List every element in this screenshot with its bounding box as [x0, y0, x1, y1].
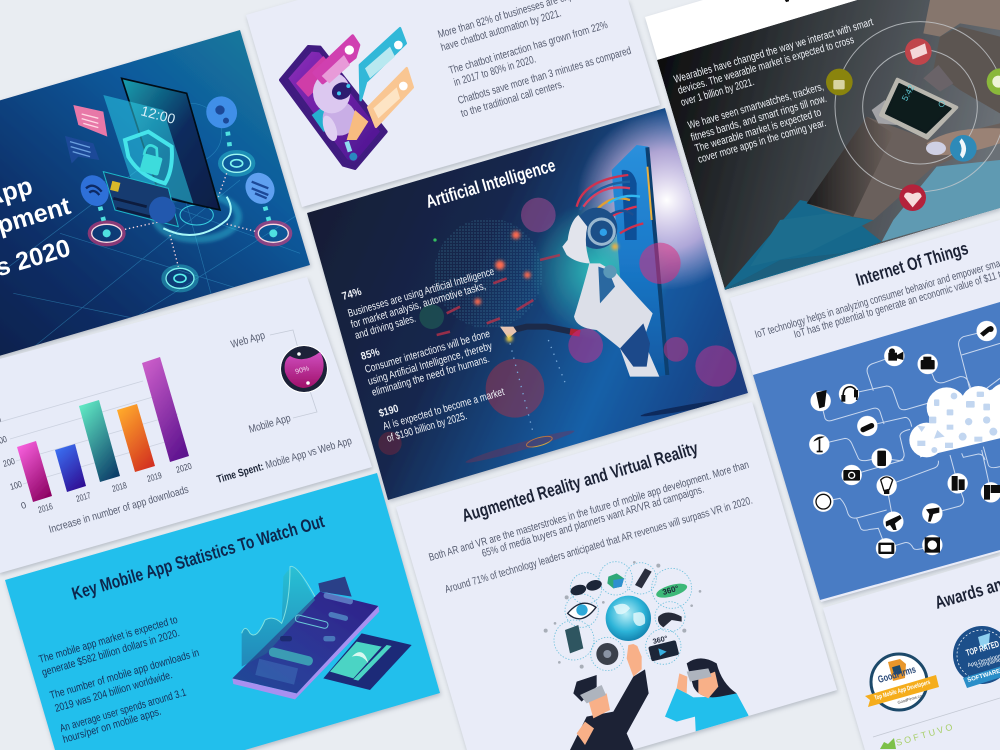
- AI statistics text: Consumer interactions will be done: [363, 328, 492, 376]
- wearables text: Wearables have changed the way we interact with smart: [672, 16, 875, 86]
- wearables text: [672, 16, 875, 166]
- AI statistics text: for market analysis, automotive tasks,: [349, 280, 487, 331]
- smartwatch photo: [657, 0, 1000, 290]
- wearables text: We have seen smartwatches, trackers,: [686, 81, 825, 132]
- IoT background: [730, 220, 1000, 602]
- AI statistics text: $190: [377, 403, 400, 420]
- GoodFirms badge: Top Mobile App Developers: [874, 679, 931, 702]
- chatbots text: Chatbots save more than 3 minutes as compared: [456, 45, 633, 107]
- device glyphs: [813, 326, 1000, 554]
- glass panel: [103, 95, 193, 203]
- statistics text: The mobile app market is expected to: [37, 614, 179, 666]
- Softuvo logo: SOFTUVO: [895, 721, 956, 748]
- cyborg emerging from phone illustration: [378, 110, 757, 466]
- panel: wearables: [645, 0, 1000, 290]
- bar chart: app downloads: 2018: [111, 480, 128, 494]
- panel: hero title slide: [0, 30, 310, 370]
- donut gauge: mobile vs web: 90%: [295, 365, 310, 376]
- AR VR text: Around 71% of technology leaders anticipated that AR revenues will surpass VR in 2020.: [443, 495, 754, 596]
- bar chart: app downloads: 2020: [175, 461, 193, 475]
- credit card: [103, 172, 178, 227]
- shield and padlock: [125, 132, 172, 183]
- panel: charts: [0, 277, 372, 573]
- cube: [607, 573, 624, 588]
- chatbots text: [436, 0, 633, 120]
- hero illustration: [0, 78, 300, 350]
- hero title: [0, 172, 74, 301]
- 360 label: [656, 584, 688, 598]
- AI background: [307, 108, 748, 500]
- wearables text: fitness bands, and smart rings till now.: [689, 93, 828, 144]
- AR VR text: Both AR and VR are the masterstrokes in the future of mobile app development. More than: [427, 459, 750, 564]
- wearables text: devices. The wearable market is expected to cross: [676, 34, 856, 97]
- eye: [568, 603, 596, 619]
- grid lines: [0, 381, 182, 484]
- donut gauge: mobile vs web: Time Spent: Mobile App vs Web App: [215, 435, 353, 486]
- wearables text: over 1 billion by 2021.: [679, 76, 756, 109]
- man with headset: [570, 644, 649, 750]
- torso: [574, 263, 659, 377]
- robot in phone illustration: [281, 28, 413, 168]
- globe: [606, 596, 651, 641]
- cloud mini icons: [917, 392, 997, 453]
- panel: augmented and virtual reality: [396, 402, 837, 750]
- statistics text: [37, 614, 201, 746]
- arm: [807, 117, 1000, 220]
- statistics background: [5, 473, 440, 750]
- AR VR text: 65% of media buyers and planners want AR/VR ad campaigns.: [480, 484, 706, 560]
- GoodFirms badge: GoodFirms.co: [897, 693, 923, 705]
- donut gauge: mobile vs web: Web App: [229, 330, 266, 351]
- bar chart: app downloads: [0, 357, 193, 536]
- chatbots background: [246, 0, 660, 207]
- woman with headset: [665, 658, 750, 750]
- IoT network diagram: [753, 302, 1000, 600]
- AR VR title: Augmented Reality and Virtual Reality: [460, 438, 700, 526]
- AI statistics text: 85%: [359, 346, 381, 363]
- phone: [122, 78, 220, 210]
- statistics text: hours/per on mobile apps.: [61, 706, 163, 746]
- panel: key mobile app statistics: [5, 473, 440, 750]
- donut gauge: mobile vs web: Mobile App: [247, 412, 292, 436]
- isometric phone and card illustration: [232, 566, 412, 699]
- bar chart: app downloads: 100: [9, 479, 23, 492]
- bar chart: app downloads: 2017: [75, 490, 92, 504]
- AI statistics text: using Artificial Intelligence, thereby: [366, 340, 494, 388]
- statistics text: 2019 was 204 billion worldwide.: [53, 669, 174, 715]
- head: [576, 208, 617, 249]
- bar chart: app downloads: 200: [2, 456, 16, 469]
- statistics text: generate $582 billion dollars in 2020.: [40, 627, 181, 679]
- chat bubbles: [73, 105, 107, 137]
- divider line: [873, 698, 1000, 737]
- sunglasses: [570, 584, 586, 596]
- statistics text: The number of mobile app downloads in: [48, 647, 201, 702]
- watch: [881, 79, 957, 138]
- chat bubbles: [314, 36, 359, 83]
- AR VR background: [396, 402, 837, 750]
- chatbots text: in 2017 to 80% in 2020.: [452, 54, 537, 89]
- strap: [872, 100, 897, 125]
- globe, VR icons and people illustration: 360°: [652, 634, 669, 646]
- gamepad: [658, 612, 682, 627]
- awards background: [823, 556, 1000, 750]
- statistics title: Key Mobile App Statistics To Watch Out: [70, 511, 327, 604]
- panel: chatbots: [246, 0, 660, 207]
- bar chart: app downloads: Increase in number of app downloads: [47, 484, 190, 536]
- app icons on rings: [905, 38, 932, 65]
- circuit rings: [89, 132, 291, 290]
- AI statistics text: eliminating the need for humans.: [370, 353, 491, 399]
- AI statistics text: and driving sales.: [353, 313, 417, 342]
- hand: [923, 0, 1000, 37]
- 360 film: [648, 640, 679, 661]
- statistics text: An average user spends around 3.1: [58, 687, 188, 735]
- hero background: [0, 30, 310, 370]
- wearables text: cover more apps in the coming year.: [696, 117, 827, 166]
- bar chart: app downloads: 2019: [146, 470, 163, 484]
- panel: internet of things: [730, 220, 1000, 602]
- wires: [577, 175, 643, 233]
- GoodFirms badge: [865, 654, 939, 710]
- globe, VR icons and people illustration: 360°: [661, 584, 680, 597]
- robot: [323, 101, 356, 136]
- AI statistics text: Businesses are using Artificial Intelligence: [346, 266, 496, 320]
- sleeve: [723, 200, 882, 290]
- charts background: [0, 277, 372, 573]
- AI title: Artificial Intelligence: [424, 155, 558, 212]
- orbit rings: [835, 22, 1000, 192]
- cloud: [909, 383, 1000, 457]
- AI statistics text: of $190 billion by 2025.: [385, 410, 469, 445]
- AI statistics text: AI is expected to become a market: [381, 386, 506, 433]
- bokeh: [378, 198, 737, 455]
- arm: [507, 327, 580, 333]
- bar chart: app downloads: 2016: [37, 501, 54, 515]
- lens: [596, 643, 618, 665]
- panel: awards: [823, 548, 1000, 750]
- glove: [565, 625, 583, 653]
- app icon discs: [206, 96, 237, 128]
- chatbots text: The chatbot interaction has grown from 22%: [447, 19, 610, 77]
- GoodFirms badge: GoodFirms: [877, 664, 918, 686]
- donut gauge: mobile vs web: [215, 330, 353, 486]
- smartwatch photo: 5:42: [900, 83, 916, 103]
- dotted globe: [434, 218, 542, 328]
- clock text: 12:00: [139, 102, 177, 127]
- AI statistics text: [340, 266, 506, 445]
- sparkles: [544, 561, 701, 669]
- AI statistics text: 74%: [340, 286, 363, 303]
- wearables background: [645, 0, 1000, 290]
- wearables text: The wearable market is expected to: [693, 107, 823, 155]
- panel: artificial intelligence: [307, 108, 757, 500]
- connecting lines: [819, 331, 1000, 549]
- Top Rated badge: [953, 626, 1000, 688]
- controller: [635, 568, 652, 588]
- globe, VR icons and people illustration: [544, 561, 750, 750]
- phone: [612, 145, 668, 380]
- bar chart: app downloads: 0: [20, 500, 27, 511]
- device nodes: [809, 321, 1000, 558]
- chatbots text: to the traditional call centers.: [459, 78, 566, 120]
